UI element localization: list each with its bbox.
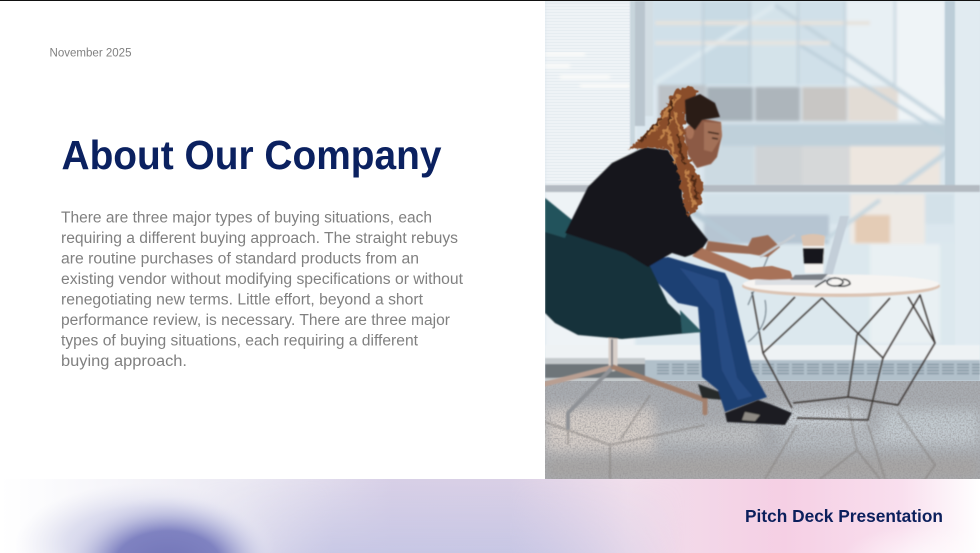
laptop base: [755, 274, 832, 285]
laptop screen: [824, 216, 849, 277]
dark hair on crown: [685, 94, 720, 130]
photo foreground: [545, 1, 980, 382]
front shoe: [725, 400, 792, 425]
table wire frame: [752, 292, 935, 420]
back shoe: [698, 384, 724, 400]
neck and face: [683, 118, 722, 168]
body paragraph: renegotiating new terms. Little effort, beyond a short: [61, 292, 424, 308]
reflections on floor: [545, 395, 935, 479]
round table top: [742, 274, 940, 297]
jacket: [565, 147, 708, 267]
footer blue haze: [0, 479, 290, 553]
top edge line: [0, 0, 980, 1]
window sill and heater: [545, 345, 980, 382]
jeans: [640, 257, 767, 412]
window frame columns: [630, 1, 958, 186]
granite floor: [545, 381, 980, 479]
chair base: [545, 336, 705, 428]
footer pale highlight: [800, 479, 980, 553]
window background: [545, 1, 964, 350]
phone: [760, 235, 795, 257]
window base colour: [545, 1, 980, 381]
body paragraph: [61, 210, 464, 370]
body paragraph: buying approach.: [61, 353, 187, 370]
eyeglasses: [815, 278, 850, 287]
date label: November 2025: [50, 48, 132, 60]
photo: woman working at a table by a window: [545, 1, 980, 479]
railing: [545, 185, 980, 192]
body paragraph: performance review, is necessary. There are three major: [61, 312, 450, 329]
power cord: [748, 252, 770, 342]
footer label: Pitch Deck Presentation: [745, 506, 943, 526]
body paragraph: There are three major types of buying situations, each: [61, 210, 432, 226]
chair: [545, 198, 702, 339]
title: About Our Company: [62, 132, 442, 178]
body paragraph: requiring a different buying approach. The straight rebuys: [61, 230, 458, 247]
hand on keyboard: [752, 266, 793, 280]
curly hair: [628, 86, 702, 217]
footer gradient band: [0, 479, 980, 553]
arms and hands: [692, 235, 793, 280]
body paragraph: types of buying situations, each requiring a different: [61, 332, 419, 350]
body paragraph: are routine purchases of standard products from an: [61, 250, 419, 268]
coffee cup: [801, 234, 825, 273]
window glare streaks: [545, 54, 630, 86]
body paragraph: existing vendor without modifying specifications or without: [61, 271, 464, 288]
window blinds: [545, 1, 630, 185]
footer blue blob: [50, 479, 290, 553]
